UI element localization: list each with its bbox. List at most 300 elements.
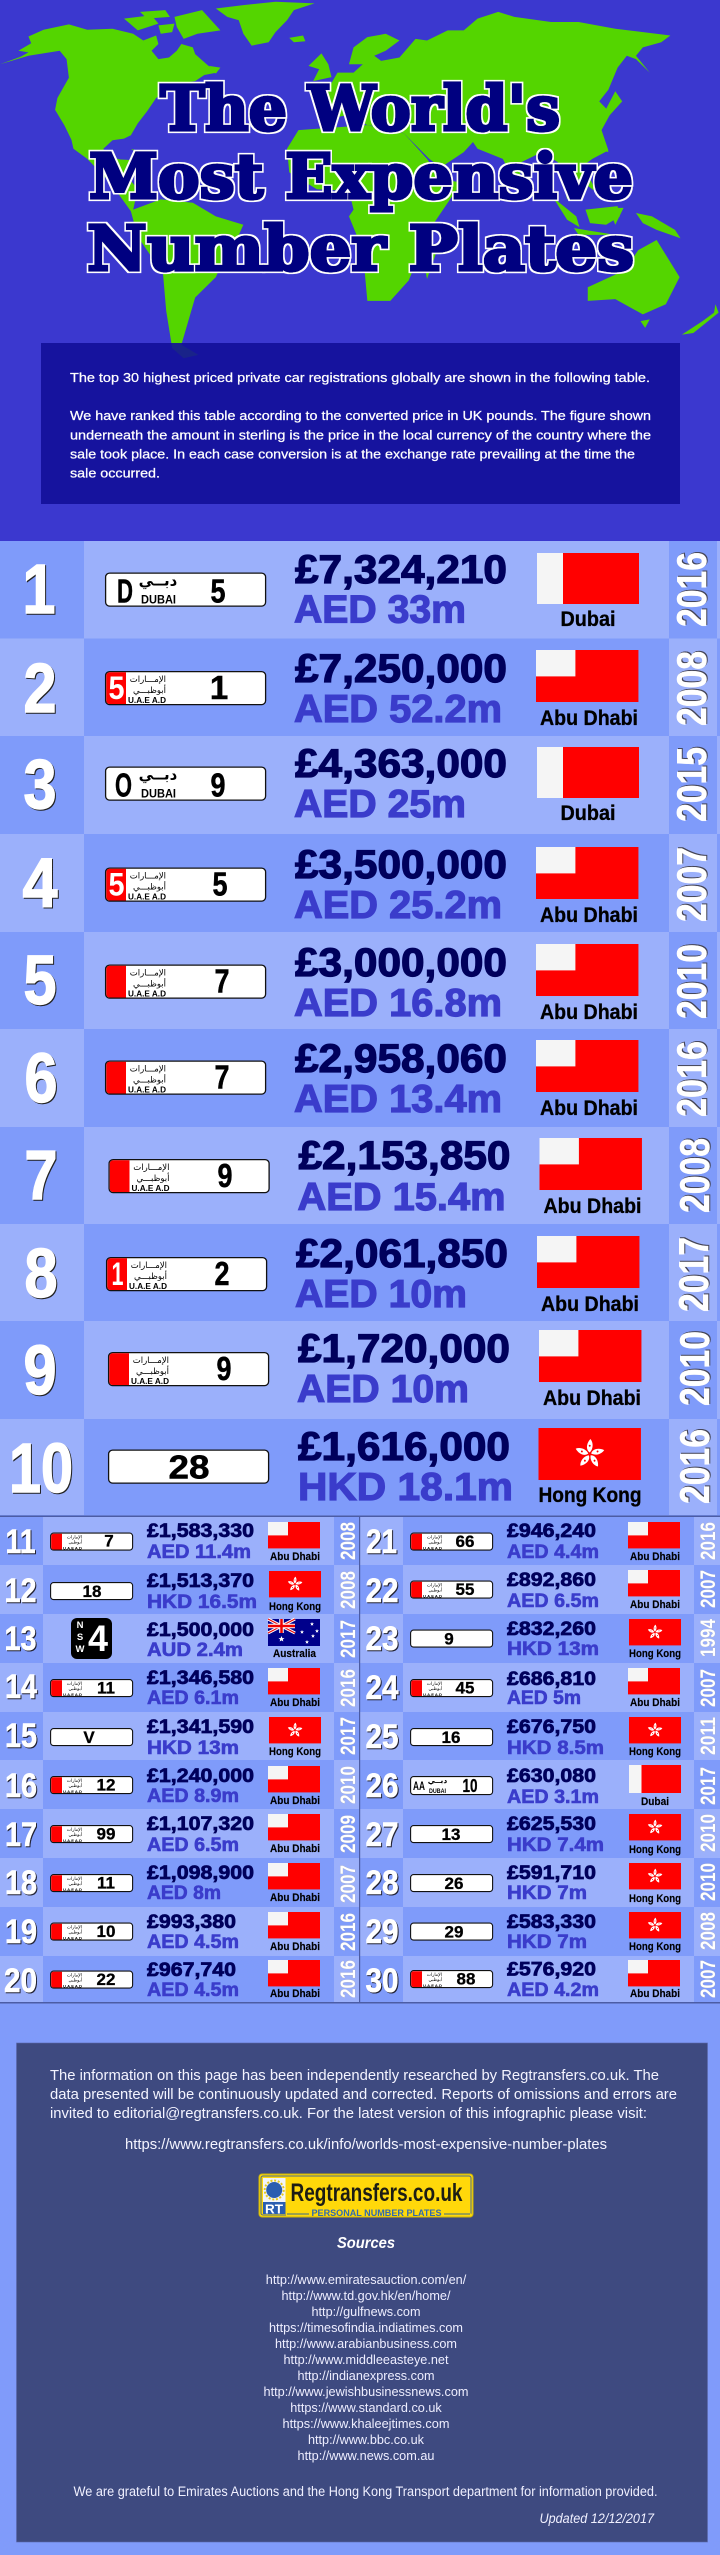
plate [411,1970,493,1988]
row 4 [0,834,720,932]
flag: Abu Dhabi [268,1522,320,1563]
sources heading: Sources [337,2235,395,2252]
plate: NSW 4: N [77,1620,84,1631]
price: £832,260 [507,1619,596,1640]
small rows: right column [360,1517,720,2002]
row 17 [0,1809,360,1858]
flag: Abu Dhabi: Abu Dhabi [540,1097,638,1120]
plate: V [83,1728,95,1747]
row 5 [0,932,720,1029]
flag: Abu Dhabi: Abu Dhabi [270,1697,320,1709]
title [87,72,634,285]
flag: Abu Dhabi: Abu Dhabi [270,1795,320,1807]
flag: Abu Dhabi: Abu Dhabi [630,1988,680,2000]
plate: 10 [462,1776,478,1796]
price: £2,061,850 [296,1232,508,1276]
price: £1,513,370 [147,1571,254,1592]
plate: 13 [442,1825,460,1844]
rank: 21 [366,1523,397,1561]
price: £946,240 [507,1521,596,1542]
plate: 7 [214,962,230,1000]
plate: O [115,766,132,804]
intro text panel: underneath the amount in sterling is the price in the local currency of the country where the [70,428,651,442]
row 29 [360,1907,720,1956]
credits text: The information on this page has been independently researched by Regtransfers.co.uk. The [50,2068,659,2084]
local price: HKD 7.4m [507,1835,604,1856]
sources list: http://www.td.gov.hk/en/home/ [282,2288,451,2303]
flag: Abu Dhabi: Abu Dhabi [270,1843,320,1855]
row 16 [0,1760,360,1809]
price: £7,250,000 [295,647,507,691]
flag: Abu Dhabi [268,1863,320,1904]
plate [51,1678,133,1698]
plate: 7 [104,1532,114,1550]
plate: 12 [97,1776,115,1794]
year: 2016 [668,552,715,627]
plate: 11 [97,1874,115,1892]
year: 2009 [337,1815,360,1853]
plate: 9 [218,1157,232,1194]
local price: AED 6.5m [147,1835,239,1856]
rank: 24 [366,1669,399,1707]
title: Most Expensive [89,140,633,213]
rank: 20 [4,1962,37,2000]
plate [411,1532,493,1551]
price: £686,810 [507,1669,596,1690]
year: 2016 [668,1041,715,1117]
local price: AED 52.2m [294,688,502,731]
flag: Hong Kong: Hong Kong [538,1484,642,1507]
plate: 9 [210,766,226,804]
row 26 [360,1760,720,1809]
plate [51,1824,133,1844]
row 30 [360,1956,720,2002]
flag: Abu Dhabi: Abu Dhabi [630,1697,680,1709]
sources list: https://timesofindia.indiatimes.com [269,2320,463,2335]
plate: NSW 4: 4 [88,1618,108,1659]
plate: 5 [212,866,228,902]
rank: 5 [24,941,56,1019]
local price: AED 6.1m [147,1688,239,1709]
year: 2017 [697,1767,720,1805]
rank: 13 [4,1620,36,1658]
world map [0,2,719,358]
year: 2017 [337,1620,360,1658]
price: £1,240,000 [147,1766,254,1787]
flag: Hong Kong [269,1571,321,1613]
flag: Dubai [629,1765,681,1808]
flag: Abu Dhabi: Abu Dhabi [270,1892,320,1904]
rank: 15 [5,1717,37,1755]
plate: 29 [445,1922,463,1942]
local price: AED 33m [294,588,466,632]
plate [411,1825,493,1844]
plate: 22 [97,1970,115,1989]
sources list: http://www.jewishbusinessnews.com [264,2384,468,2399]
flag: Hong Kong: Hong Kong [269,1746,321,1758]
year: 2015 [668,747,715,822]
flag: Australia: Australia [273,1648,317,1660]
footer panel [16,2043,708,2542]
year: 2016 [697,1522,720,1560]
plate [109,1157,269,1194]
flag: Australia [268,1619,320,1660]
year: 2010 [697,1863,720,1901]
price: £4,363,000 [295,742,507,786]
price: £630,080 [507,1766,596,1787]
local price: AED 13.4m [294,1078,502,1121]
local price: AED 15.4m [298,1176,506,1219]
plate [106,669,266,706]
plate [109,1350,269,1387]
sources list: http://www.middleeasteye.net [284,2352,449,2367]
flag: Abu Dhabi: Abu Dhabi [540,707,638,730]
local price: HKD 7m [507,1883,587,1904]
sources list: https://www.standard.co.uk [290,2400,442,2415]
plate: دبــي [428,1776,447,1785]
plate: NSW 4: S [77,1632,83,1643]
plate [411,1776,493,1796]
updated date: Updated 12/12/2017 [540,2511,654,2526]
year: 2017 [670,1237,717,1312]
plate: D [117,572,133,610]
flag: Abu Dhabi [539,1330,641,1410]
price: £1,500,000 [147,1620,254,1641]
plate [106,766,266,804]
rank: 26 [366,1767,398,1805]
row 13 [0,1614,360,1663]
row 11 [0,1517,360,1565]
price: £7,324,210 [295,548,507,592]
year: 2008 [337,1522,360,1560]
flag: Abu Dhabi [268,1766,320,1807]
year: 2016 [337,1913,360,1951]
flag: Hong Kong [269,1717,321,1758]
plate [51,1728,133,1747]
plate: 66 [456,1532,474,1551]
year: 2016 [337,1669,360,1707]
flag: Hong Kong [629,1814,681,1856]
plate [411,1874,493,1893]
intro text panel: The top 30 highest priced private car registrations globally are shown in the following table. [70,370,650,385]
flag: Abu Dhabi [536,847,638,927]
rank: 4 [22,844,58,922]
local price: AED 6.5m [507,1591,599,1612]
rank: 25 [366,1718,398,1756]
flag: Abu Dhabi [268,1912,320,1953]
sources list: https://www.khaleejtimes.com [282,2416,450,2431]
row 12 [0,1565,360,1614]
table background [0,541,720,2555]
flag: Abu Dhabi [268,1668,320,1709]
price: £3,500,000 [295,843,507,887]
credits text [50,2068,677,2122]
price: £591,710 [507,1863,596,1884]
year: 2011 [697,1717,720,1755]
sources list: http://www.arabianbusiness.com [275,2336,457,2351]
thanks line: We are grateful to Emirates Auctions and the Hong Kong Transport department for information provided. [74,2484,658,2499]
year: 2008 [337,1571,360,1609]
flag: Hong Kong [629,1619,681,1660]
plate: 99 [97,1824,115,1844]
row 14 [0,1663,360,1712]
plate [411,1678,493,1698]
rank: 17 [5,1816,37,1854]
row 22 [360,1565,720,1614]
logo: Regtransfers.co.uk [259,2174,473,2219]
price: £583,330 [507,1912,596,1933]
year: 2010 [337,1766,360,1804]
plate: 45 [456,1678,474,1698]
local price: HKD 18.1m [298,1466,513,1509]
flag: Abu Dhabi: Abu Dhabi [544,1195,642,1218]
rank: 18 [5,1864,37,1902]
plate: NSW 4 [71,1618,112,1659]
flag: Hong Kong: Hong Kong [269,1601,321,1613]
plate: 1 [112,1256,124,1292]
local price: AED 16.8m [294,982,502,1025]
flag: Hong Kong: Hong Kong [629,1746,681,1758]
local price: AED 8m [147,1883,221,1904]
year: 2007 [668,847,715,922]
rank: 29 [366,1913,398,1951]
local price: AED 4.5m [147,1932,239,1953]
price: £1,346,580 [147,1668,254,1689]
flag: Abu Dhabi [536,1040,638,1120]
plate: 28 [168,1448,210,1486]
year: 2017 [337,1717,360,1755]
local price: AED 5m [507,1688,581,1709]
local price: AED 10m [295,1273,467,1316]
plate [106,1058,266,1096]
plate [106,572,266,610]
price: £1,583,330 [147,1521,254,1542]
year: 2016 [337,1960,360,1998]
plate: DUBAI [429,1788,446,1795]
flag: Abu Dhabi [268,1814,320,1855]
rank: 2 [24,649,56,727]
rank: 11 [6,1523,36,1561]
flag: Abu Dhabi: Abu Dhabi [540,904,638,927]
flag: Hong Kong [629,1912,681,1953]
row 20 [0,1956,360,2002]
row 8 [0,1224,720,1321]
rank: 1 [22,550,56,628]
plate: 2 [214,1255,230,1292]
year: 2008 [697,1912,720,1950]
row 19 [0,1907,360,1956]
flag: Abu Dhabi [536,650,638,730]
sources list: http://www.bbc.co.uk [308,2432,424,2447]
local price: AED 25m [294,783,466,826]
rank: 10 [9,1429,73,1507]
flag: Hong Kong: Hong Kong [629,1893,681,1905]
local price: HKD 13m [147,1738,239,1759]
hero background [0,0,720,541]
local price: AED 11.4m [147,1542,251,1563]
plate: 5 [108,866,124,902]
sources list: http://indianexpress.com [298,2368,434,2383]
flag: Abu Dhabi [537,1236,639,1316]
plate: 16 [442,1728,460,1747]
plate: 5 [210,572,226,610]
credits text: data presented will be continuously updated and corrected. Reports of omissions and errors are [50,2087,677,2103]
plate: AA [413,1779,425,1793]
row 27 [360,1809,720,1858]
row 21 [360,1517,720,1565]
credits text: invited to editorial@regtransfers.co.uk. For the latest version of this infographic please visit: [50,2106,647,2122]
rank: 9 [24,1331,56,1409]
row 10 [0,1419,720,1515]
local price: AED 4.2m [507,1980,599,2001]
intro text panel: sale took place. In each case conversion is at the exchange rate prevailing at the time the [70,446,635,462]
price: £1,616,000 [298,1425,510,1469]
row 15 [0,1712,360,1760]
row 2 [0,638,720,736]
price: £2,958,060 [295,1037,507,1081]
plate: 5 [108,670,124,706]
intro text panel: We have ranked this table according to the converted price in UK pounds. The figure shown [70,408,651,423]
flag: Abu Dhabi: Abu Dhabi [541,1293,639,1316]
flag: Abu Dhabi: Abu Dhabi [270,1988,320,2000]
flag: Abu Dhabi: Abu Dhabi [270,1941,320,1953]
price: £3,000,000 [295,941,507,985]
price: £892,860 [507,1570,596,1591]
plate: 11 [97,1678,115,1698]
flag: Dubai: Dubai [560,802,616,825]
year: 2007 [697,1960,720,1998]
year: 2010 [697,1814,720,1852]
year: 2007 [697,1570,720,1608]
plate [51,1532,133,1550]
flag: Dubai [537,747,639,825]
plate [106,962,266,1000]
plate: 7 [214,1058,230,1096]
plate: 10 [97,1922,115,1941]
plate: NSW 4: W [76,1644,85,1655]
rank: 30 [366,1962,398,2000]
local price: AED 3.1m [507,1787,599,1808]
price: £1,720,000 [298,1327,510,1371]
price: £625,530 [507,1814,596,1835]
plate [51,1776,133,1794]
logo: Regtransfers.co.uk: Regtransfers.co.uk [290,2179,463,2207]
plate [411,1728,493,1747]
row 23 [360,1614,720,1663]
flag: Abu Dhabi [628,1668,680,1709]
plate: 88 [457,1970,475,1988]
local price: AED 25.2m [294,884,502,927]
row 6 [0,1029,720,1127]
row 18 [0,1858,360,1907]
flag: Abu Dhabi [268,1960,320,2000]
sources list [264,2272,468,2463]
flag: Dubai: Dubai [560,608,616,631]
row 3 [0,736,720,834]
plate [411,1580,493,1599]
price: £1,341,590 [147,1717,254,1738]
year: 2010 [668,944,715,1019]
sources list: http://www.emiratesauction.com/en/ [266,2272,467,2287]
plate: 1 [210,669,228,706]
logo: Regtransfers.co.uk: RT [265,2202,283,2216]
flag: Abu Dhabi [628,1522,680,1563]
rank: 27 [366,1816,398,1854]
plate [51,1970,133,1989]
plate: 18 [83,1582,101,1601]
row 7 [0,1127,720,1224]
row 24 [360,1663,720,1712]
flag: Abu Dhabi: Abu Dhabi [543,1387,641,1410]
row 9 [0,1321,720,1419]
local price: HKD 16.5m [147,1592,257,1613]
local price: AUD 2.4m [147,1640,243,1661]
local price: AED 10m [297,1368,469,1411]
rank: 22 [366,1572,398,1610]
flag: Abu Dhabi: Abu Dhabi [540,1001,638,1024]
rank: 12 [4,1572,36,1610]
small rows: left column [0,1517,360,2002]
sources list: http://gulfnews.com [312,2304,420,2319]
plate: 9 [216,1350,232,1387]
local price: AED 4.5m [147,1980,239,2001]
row 1 [0,541,720,638]
flag: Abu Dhabi: Abu Dhabi [630,1551,680,1563]
price: £2,153,850 [298,1134,510,1178]
rank: 3 [24,745,56,823]
flag: Hong Kong: Hong Kong [629,1844,681,1856]
flag: Abu Dhabi [628,1960,680,2000]
rank: 14 [5,1668,37,1706]
price: £1,107,320 [147,1814,254,1835]
local price: HKD 7m [507,1932,587,1953]
title: The World's [160,72,560,145]
price: £676,750 [507,1717,596,1738]
price: £1,098,900 [147,1863,254,1884]
flag: Abu Dhabi [540,1138,642,1218]
flag: Abu Dhabi [628,1570,680,1611]
rank: 16 [5,1767,37,1805]
year: 2008 [671,1138,718,1213]
price: £967,740 [147,1960,236,1981]
year: 2007 [697,1669,720,1707]
rank: 7 [24,1136,58,1214]
local price: HKD 8.5m [507,1738,604,1759]
flag: Abu Dhabi [536,944,638,1024]
plate: 26 [445,1874,463,1893]
local price: HKD 13m [507,1639,599,1660]
year: 2016 [671,1429,718,1504]
row 25 [360,1712,720,1760]
rank: 23 [366,1620,398,1658]
logo: Regtransfers.co.uk: PERSONAL NUMBER PLATES [312,2208,442,2219]
plate [107,1255,267,1292]
row 28 [360,1858,720,1907]
flag: Hong Kong [629,1863,681,1905]
plate [106,866,266,902]
plate [51,1874,133,1892]
page url: https://www.regtransfers.co.uk/info/worlds-most-expensive-number-plates [125,2137,607,2153]
flag: Hong Kong: Hong Kong [629,1648,681,1660]
rank: 6 [24,1039,58,1117]
flag: Abu Dhabi: Abu Dhabi [270,1551,320,1563]
year: 2008 [668,651,715,726]
year: 2010 [671,1331,718,1406]
plate [411,1922,493,1942]
flag: Dubai: Dubai [641,1796,669,1808]
price: £993,380 [147,1912,236,1933]
local price: AED 4.4m [507,1542,599,1563]
